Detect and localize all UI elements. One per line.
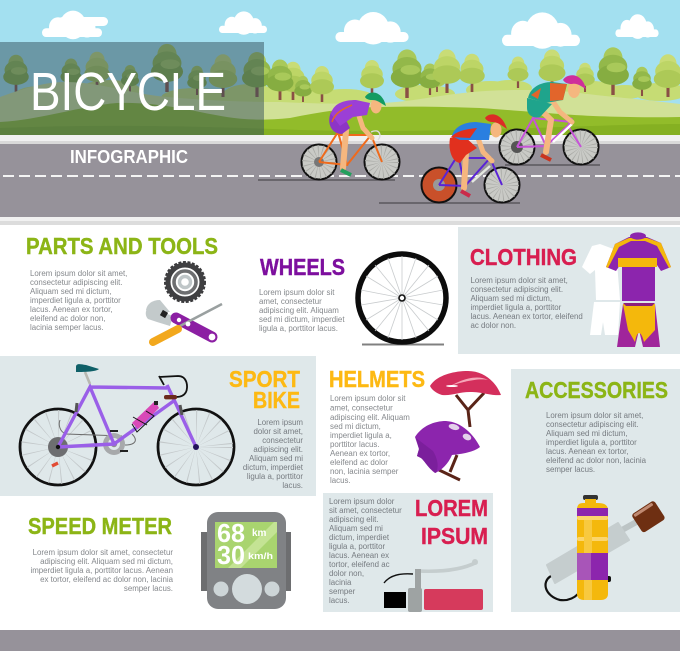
text block: consectetur <box>262 436 303 445</box>
text block: Lorem ipsum <box>257 418 303 427</box>
cyclist: teal rider <box>500 75 600 165</box>
text block: ac dolor non. <box>470 321 516 330</box>
heading: WHEELS <box>260 254 345 280</box>
text block: dolor sit amet, <box>253 427 303 436</box>
text block: semper <box>329 587 356 596</box>
panel: parts and tools <box>26 233 222 342</box>
heading: HELMETS <box>329 366 425 392</box>
text block: Aliquam sed mi <box>329 524 383 533</box>
text block: tortor, eleifend ac <box>329 560 390 569</box>
text block: Aenean ex tortor, <box>330 449 390 458</box>
text block: ex tortor, eleifend ac dolor non, lacinia <box>40 575 174 584</box>
icon: wheel <box>358 254 446 344</box>
panel: wheels <box>259 254 446 344</box>
text block: lacus. Aenean ex tortor, eleifend <box>470 312 583 321</box>
text block: lacinia semper lacus. <box>30 323 104 332</box>
text block: adipiscing elit. Aliquam sed mi dictum, <box>40 557 173 566</box>
text block: imperdiet ligula a, <box>330 431 392 440</box>
text block: imperdiet ligula a, porttitor <box>470 303 562 312</box>
icon: purple helmet <box>415 421 480 480</box>
text block: lacus. <box>330 476 351 485</box>
text block: consectetur adipiscing elit. <box>30 278 123 287</box>
icon: water bottle <box>577 495 608 600</box>
text block: Lorem ipsum dolor sit <box>259 288 335 297</box>
text block: adipiscing elit. Aliquam <box>330 413 410 422</box>
text block: sed mi dictum, <box>330 422 381 431</box>
panel: helmets <box>329 366 501 485</box>
bicycle illustration <box>20 364 234 485</box>
icon: gear and tools <box>146 262 222 342</box>
icon: shorts <box>617 303 660 347</box>
screen <box>215 522 277 568</box>
icon: pump <box>545 500 666 600</box>
text block: imperdiet ligula a, porttitor <box>546 438 637 447</box>
text block: sit amet, consectetur <box>329 506 402 515</box>
banner scene <box>0 0 680 225</box>
subtitle: INFOGRAPHIC <box>70 147 188 167</box>
panel: clothing <box>458 227 680 354</box>
text block: semper lacus. <box>546 465 595 474</box>
panel: accessories <box>511 369 680 612</box>
text block: dictum, imperdiet <box>243 463 304 472</box>
heading line 2: BIKE <box>253 387 300 413</box>
cyclist: blue rider <box>379 114 520 203</box>
heading: LOREM <box>415 495 488 521</box>
icon: red helmet <box>430 371 501 427</box>
text block: dictum, imperdiet <box>329 533 390 542</box>
hills <box>0 82 680 136</box>
text block: semper lacus. <box>124 584 173 593</box>
text block: adipiscing elit. Aliquam <box>259 306 339 315</box>
panel: lorem ipsum <box>323 493 493 612</box>
text block: eleifend ac dolor <box>330 458 388 467</box>
heading: SPORT <box>229 366 300 392</box>
footer band <box>0 630 680 651</box>
text block: adipiscing elit. <box>253 445 303 454</box>
text block: Aliquam sed mi <box>249 454 303 463</box>
panel: speed meter <box>28 512 291 609</box>
icon: jersey <box>606 232 671 301</box>
text block: amet, consectetur <box>330 404 393 412</box>
road <box>0 135 680 225</box>
heading: SPEED METER <box>28 513 172 539</box>
text block: imperdiet ligula a, porttitor <box>30 296 121 305</box>
text block: lacinia <box>329 578 352 587</box>
text block: amet, consectetur <box>259 297 322 306</box>
text block: Aliquam sed mi dictum, <box>30 287 112 296</box>
text block: lacus. Aenean ex tortor, <box>546 447 628 456</box>
text block: lacus. <box>282 481 303 490</box>
icon: brake lever <box>384 559 483 612</box>
text block: lacus. Aenean ex <box>329 551 389 560</box>
text block: Lorem ipsum dolor sit amet, <box>30 269 127 278</box>
icon: speed meter device: km <box>252 528 267 539</box>
text block: eleifend ac dolor non, <box>30 314 105 323</box>
text block: ligula a, porttitor <box>329 542 386 551</box>
text block: Aliquam sed mi dictum, <box>470 294 552 303</box>
icon: speed meter device <box>201 512 291 609</box>
text block: lacus. Aenean ex tortor, <box>30 305 112 314</box>
text block: consectetur adipiscing elit. <box>470 285 563 294</box>
icon: speed meter device: 68 <box>217 518 245 548</box>
text block: porttitor lacus. <box>330 440 380 449</box>
text block: Aliquam sed mi dictum, <box>546 429 628 438</box>
icon: speed meter device: 30 <box>217 540 245 570</box>
heading: CLOTHING <box>470 244 577 270</box>
icon: speed meter device: km/h <box>248 551 273 562</box>
cyclist: purple rider <box>258 93 400 180</box>
title: BICYCLE <box>30 62 226 122</box>
text block: sed mi dictum, imperdiet <box>259 315 345 324</box>
icon: white kit silhouette <box>582 244 620 335</box>
heading line 2: IPSUM <box>421 523 488 549</box>
sky <box>0 0 680 136</box>
text block: eleifend ac dolor non, lacinia <box>546 456 647 465</box>
text block: Lorem ipsum dolor sit amet, <box>470 276 568 285</box>
heading: PARTS AND TOOLS <box>26 233 218 259</box>
text block: Lorem ipsum dolor sit <box>330 394 406 403</box>
text block: adipiscing elit. <box>329 515 379 524</box>
clouds <box>42 11 659 49</box>
text block: ligula a, porttitor <box>247 472 303 481</box>
text block: dolor non, <box>329 569 364 578</box>
panel: sport bike <box>0 356 316 496</box>
title overlay panel <box>0 42 264 135</box>
background bushes <box>14 80 680 108</box>
text block: Lorem ipsum dolor sit amet, <box>546 411 643 420</box>
trees <box>3 44 680 102</box>
text block: Lorem ipsum dolor <box>329 497 395 506</box>
text block: consectetur adipiscing elit. <box>546 420 639 429</box>
text block: Lorem ipsum dolor sit amet, consectetur <box>33 548 173 557</box>
text block: ligula a, porttitor lacus. <box>259 324 338 333</box>
text block: lacus. <box>329 596 350 605</box>
text block: non, lacinia semper <box>330 467 399 476</box>
text block: imperdiet ligula a, porttitor lacus. Aenean <box>30 566 173 575</box>
